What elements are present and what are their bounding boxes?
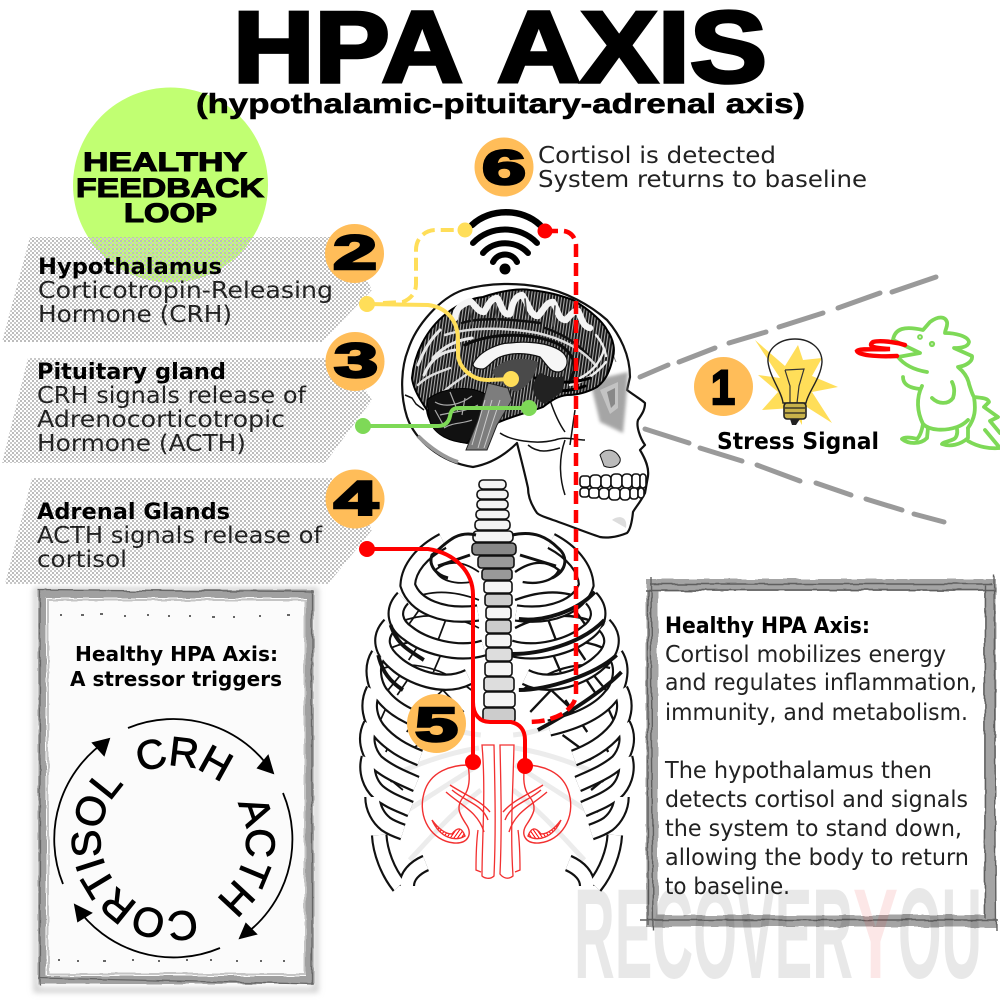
panel: healthy HPA axis explanation: detects cortisol and signals <box>665 787 968 813</box>
cycle labels: CORTISOL <box>71 778 196 940</box>
panel: healthy HPA axis explanation <box>640 575 998 930</box>
skeleton illustration <box>367 284 648 886</box>
brainstem <box>466 383 512 450</box>
panel: pituitary gland: Hormone (ACTH) <box>37 431 246 457</box>
corpus callosum <box>473 342 567 372</box>
cycle labels <box>71 736 276 940</box>
text: step six <box>538 143 867 193</box>
step number 2: 2 <box>333 227 377 280</box>
panel: hypothalamus: Hypothalamus <box>38 255 222 280</box>
text: stressor heading: A stressor triggers <box>70 667 282 691</box>
connector: red dashed feedback <box>527 224 576 722</box>
green circle badge: healthy feedback loop: FEEDBACK <box>76 173 265 203</box>
cycle arrows <box>54 719 292 957</box>
sketched dots <box>58 614 290 961</box>
spine <box>472 480 516 722</box>
panel: pituitary gland <box>2 358 372 463</box>
green circle badge: healthy feedback loop: HEALTHY <box>83 147 247 177</box>
kidneys <box>422 745 571 878</box>
step number 1 <box>694 357 753 416</box>
text: stressor heading <box>70 642 282 691</box>
panel: adrenal glands <box>5 478 372 584</box>
step number 1: 1 <box>711 362 735 415</box>
panel: healthy HPA axis explanation: to baseline. <box>665 874 790 900</box>
text: step six: Cortisol is detected <box>538 143 776 169</box>
panel: healthy HPA axis explanation: Cortisol mobilizes energy <box>665 642 946 668</box>
ribcage <box>367 541 627 886</box>
panel: adrenal glands: Adrenal Glands <box>37 500 230 525</box>
green circle badge: healthy feedback loop <box>73 88 268 282</box>
cerebellum <box>427 389 487 443</box>
step number 2 <box>325 224 384 283</box>
panel: hypothalamus: Hormone (CRH) <box>38 302 232 328</box>
panel: adrenal glands: ACTH signals release of <box>37 523 323 549</box>
step number 5 <box>407 694 466 753</box>
stress signal beam <box>640 277 944 522</box>
panel: pituitary gland: Pituitary gland <box>37 360 226 385</box>
panel: healthy HPA axis explanation: allowing the body to return <box>665 845 969 871</box>
cycle labels: ACTH <box>218 802 276 918</box>
icon: red tongue <box>857 341 905 356</box>
subtitle: (hypothalamic-pituitary-adrenal axis) <box>196 88 805 119</box>
text: stressor heading: Healthy HPA Axis: <box>75 642 278 666</box>
connector: yellow dashed <box>383 230 465 303</box>
panel: pituitary gland: Adrenocorticotropic <box>37 407 285 433</box>
step number 6 <box>474 138 534 196</box>
icon: light bulb <box>755 339 838 425</box>
step number 3 <box>326 332 384 391</box>
step number 4 <box>326 470 384 528</box>
step number 3: 3 <box>334 335 378 388</box>
thalamus <box>492 359 538 392</box>
panel: healthy HPA axis explanation: and regulates inflammation, <box>665 670 977 696</box>
title <box>233 0 767 104</box>
panel: pituitary gland: CRH signals release of <box>37 383 307 409</box>
panel: hypothalamus <box>2 237 372 342</box>
panel: stressor cycle <box>31 585 321 995</box>
step number 4: 4 <box>334 473 378 526</box>
label: stress signal: Stress Signal <box>717 429 879 455</box>
green circle badge: healthy feedback loop: LOOP <box>124 198 217 228</box>
signal: wifi icon <box>472 212 540 274</box>
panel: healthy HPA axis explanation: the system to stand down, <box>665 816 962 842</box>
connector: pituitary line <box>355 400 537 434</box>
cycle labels: CRH <box>137 736 234 782</box>
skull <box>402 284 648 538</box>
connector: adrenal line <box>359 541 533 774</box>
brain <box>412 289 614 450</box>
brain folds <box>418 295 606 395</box>
icon: green dinosaur <box>893 318 1000 448</box>
step number 6: 6 <box>482 142 526 195</box>
panel: adrenal glands: cortisol <box>37 547 127 573</box>
step number 5: 5 <box>415 699 458 752</box>
panel: hypothalamus: Corticotropin-Releasing <box>38 278 333 304</box>
connector: hypothalamus line <box>359 222 519 387</box>
panel: healthy HPA axis explanation: immunity, and metabolism. <box>665 700 968 726</box>
panel: healthy HPA axis explanation: The hypothalamus then <box>664 758 932 784</box>
collar bones <box>431 533 565 578</box>
panel: healthy HPA axis explanation: Healthy HPA Axis: <box>665 614 870 639</box>
teeth <box>580 474 646 500</box>
text: step six: System returns to baseline <box>538 167 867 193</box>
eye socket <box>590 372 628 433</box>
